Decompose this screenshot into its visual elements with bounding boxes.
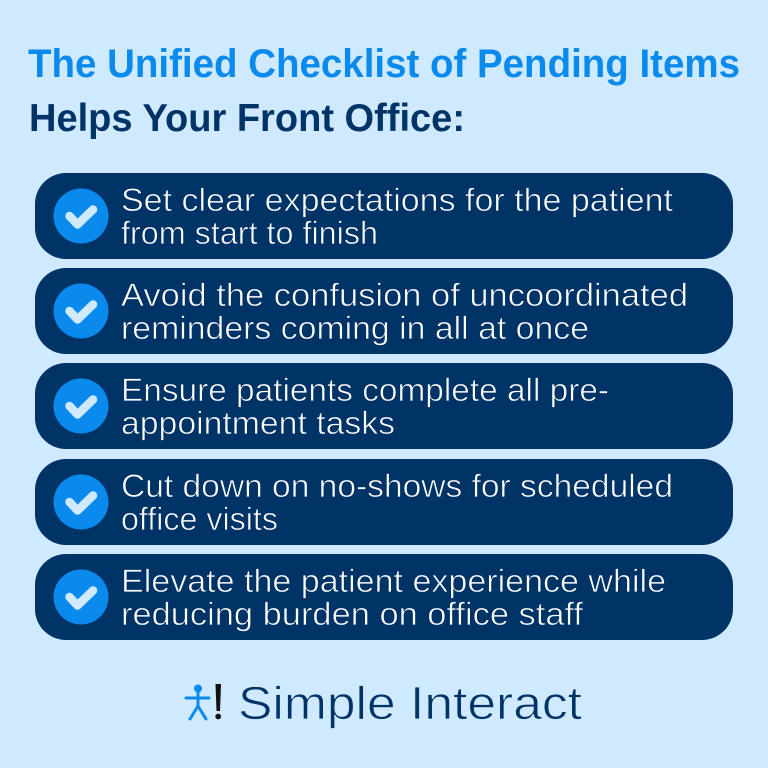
logo <box>186 677 582 729</box>
panel: item 4: Cut down on no-shows for scheduled <box>121 468 673 504</box>
icon: stick figure <box>186 684 209 719</box>
panel: item 5: Elevate the patient experience while <box>121 563 666 599</box>
logo wordmark: Simple Interact <box>238 677 582 729</box>
panel: item 4: office visits <box>121 501 278 537</box>
panel: item 1: Set clear expectations for the patient <box>121 182 673 218</box>
icon: exclamation mark <box>215 684 221 719</box>
panel: item 5 <box>35 554 733 640</box>
subtitle: Helps Your Front Office: <box>29 97 465 140</box>
panel: item 4 <box>35 459 733 545</box>
panel: item 1: from start to finish <box>121 215 378 251</box>
panel: item 3: appointment tasks <box>121 405 395 441</box>
panel: item 3 <box>35 363 733 449</box>
panel: item 2: Avoid the confusion of uncoordinated <box>121 277 688 313</box>
panel: item 5: reducing burden on office staff <box>121 596 583 632</box>
panel: item 1 <box>35 173 733 259</box>
title: The Unified Checklist of Pending Items <box>28 42 740 86</box>
panel: item 2 <box>35 268 733 354</box>
panel: item 3: Ensure patients complete all pre- <box>121 372 609 408</box>
panel: item 2: reminders coming in all at once <box>121 310 589 346</box>
